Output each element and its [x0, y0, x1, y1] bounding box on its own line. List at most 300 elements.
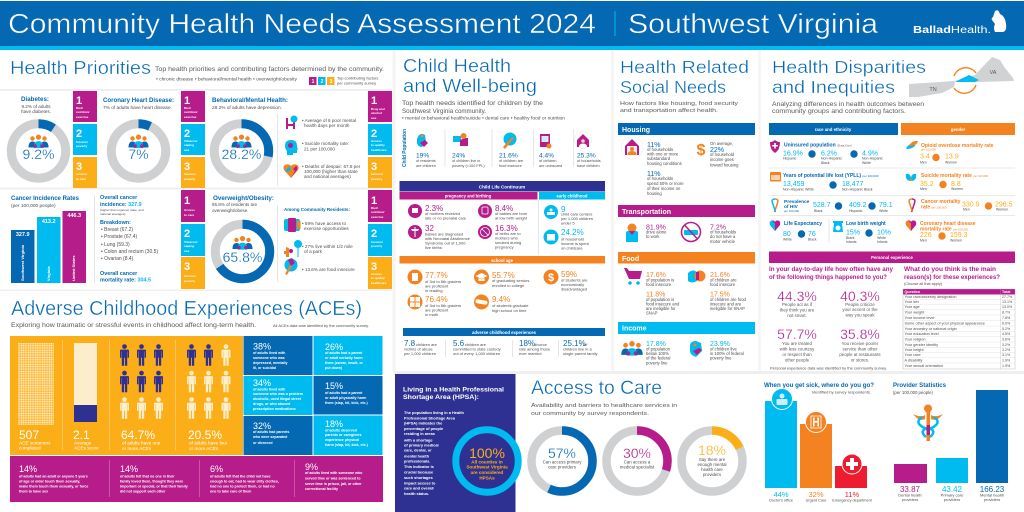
- group: pregnancy and birthing stats: mothers who: [495, 236, 519, 240]
- header band: Southwest Virginia: [628, 8, 878, 39]
- group: gender disparities: Men: [920, 238, 927, 242]
- panel: ACE percentages grid: them (swear, insult, or: [325, 361, 364, 365]
- group: early childhood stats: per 1,000 children: [561, 216, 593, 221]
- group: race and ethnicity disparities: Low birth weight: [846, 221, 886, 227]
- text block: day-to-day experience stats: or respect than: [782, 352, 812, 357]
- table: reasons for experiences: 4.5%: [1002, 332, 1011, 336]
- text block: day-to-day experience stats: People criticize: [845, 302, 875, 307]
- heading: adverse childhood experiences: Adverse Childhood Experiences (ACEs): [11, 298, 362, 320]
- group: early childhood stats: [544, 205, 593, 250]
- group: gender disparities: Men: [963, 208, 970, 212]
- table: reasons for experiences: Your ancestry or national origin: [904, 327, 957, 331]
- bar chart: cancer incidence: Southwest Virginia: [20, 244, 25, 281]
- group: race and ethnicity disparities: of HIV: [784, 204, 799, 210]
- panel: health professional shortage area: The population living in a Health: [404, 410, 464, 415]
- group: gender disparities: 35.2: [920, 181, 934, 188]
- panel: health professional shortage area: care and overall: [404, 486, 434, 490]
- panel: behavioral and mental health: • Deaths of despair: 67.8 per: [302, 164, 361, 169]
- donut: mental health providers 18%: 18%: [698, 442, 726, 458]
- panel: access to care heading: Access to Care: [531, 378, 662, 399]
- group: early childhood stats: child care centers: [561, 212, 592, 216]
- table: reasons for experiences: 8.7%: [1002, 310, 1011, 314]
- group: pregnancy and birthing stats: 2.3%: [425, 204, 443, 213]
- cards: cancer factors: 3: [184, 261, 190, 273]
- panel: ACE statistics orange block: of adults have one: [122, 440, 161, 446]
- panel: ACE percentages grid: 38%: [253, 342, 271, 352]
- panel: ACE magenta band: of adults had an adult or anyone 5 years: [19, 474, 88, 478]
- panel: housing: of their income on: [647, 186, 681, 191]
- panel: food: [618, 252, 755, 316]
- panel: adverse childhood experiences stats: of: [584, 342, 588, 347]
- panel: ACE percentages grid: 34%: [253, 378, 271, 388]
- table: reasons for experiences: 13.1%: [1002, 300, 1013, 304]
- text block: cancer overview: • Breast (67.2): [101, 227, 133, 233]
- text block: day-to-day experience stats: with less courtesy: [780, 346, 815, 352]
- group: gender disparities: rate per 100,000: [921, 204, 946, 210]
- table: reasons for experiences: 3.6%: [1002, 338, 1011, 342]
- chart: when you get sick, where do you go: Doctor's office: [769, 498, 793, 502]
- header band: [0, 1, 1024, 50]
- panel: food: food insecure: [710, 282, 736, 287]
- group: pregnancy and birthing stats: 16.3%: [495, 224, 518, 233]
- table: reasons for experiences: Your income level: [904, 316, 934, 320]
- map: Tennessee and Virginia: [909, 57, 1014, 97]
- group: gender disparities: 3.4: [920, 154, 930, 160]
- donut: 28.2%: [214, 124, 269, 178]
- panel: access to care heading: our community by survey respondents.: [531, 411, 649, 417]
- group: gender disparities: Women: [996, 208, 1008, 212]
- cards: obesity factors: Income/: [371, 240, 383, 244]
- icon: no car: [682, 222, 700, 242]
- panel: child health and well-being heading: Top health needs identified for children by the: [402, 100, 544, 107]
- panel: race and ethnicity bar: race and ethnicity: [815, 127, 852, 132]
- panel: ACE magenta band: [10, 456, 383, 502]
- icon: emergency cross: [842, 454, 862, 474]
- panel: adverse childhood experiences stats: ever married: [519, 351, 541, 356]
- panel: school age: are proficient: [425, 308, 449, 312]
- panel: overweight and obesity: • 59% have access to: [302, 221, 346, 226]
- chart: provider statistics: Dental health: [898, 492, 922, 498]
- panel: health professional shortage area: [395, 374, 518, 512]
- icon: urgent care H: [806, 412, 826, 432]
- table: reasons for experiences: Total: [1002, 290, 1010, 294]
- cards: obesity factors: [368, 190, 392, 289]
- group: pregnancy and birthing stats: smoked during: [495, 240, 521, 245]
- cards: diabetes factors: to care: [76, 177, 86, 181]
- icon: commuter: [626, 224, 638, 242]
- icon: heart: [770, 220, 780, 231]
- group: race and ethnicity disparities: Hispanic: [783, 156, 797, 160]
- panel: health priorities heading: Top health priorities and contributing factors determined by the community.: [155, 66, 384, 73]
- table: reasons for experiences: 1.9%: [1002, 364, 1011, 368]
- panel: health professional shortage area: (HPSA) indicates the: [404, 420, 443, 426]
- group: pregnancy and birthing stats: [408, 200, 538, 255]
- cards: diabetes factors: exercise: [76, 115, 89, 119]
- table: reasons for experiences: Some other aspect of your physical appearance: [904, 322, 985, 326]
- icon: diploma: [474, 294, 489, 310]
- bar chart: cancer incidence: [11, 211, 86, 283]
- panel: school age: 9.4%: [492, 295, 510, 304]
- donut: 65.8%: [215, 224, 270, 279]
- panel: food: ineligible for SNAP: [710, 306, 745, 311]
- group: gender disparities: [906, 141, 1013, 242]
- panel: school age: of students are: [561, 278, 588, 282]
- panel: housing: income goes: [710, 157, 734, 162]
- panel: school age: 59%: [561, 270, 577, 279]
- cards: heart disease factors: 2: [184, 128, 190, 140]
- panel: income: poverty line: [710, 356, 732, 360]
- group: race and ethnicity disparities: Black: [814, 209, 823, 213]
- panel: child population: 21.6%: [499, 152, 518, 160]
- text block: cancer overview: national averages): [100, 212, 125, 216]
- panel: food: 21.6%: [710, 272, 730, 279]
- panel: school age: of graduating seniors: [492, 278, 529, 283]
- panel: ACE percentages grid: of adults had a parent: [325, 351, 363, 355]
- panel: gender bar: gender: [951, 127, 965, 132]
- panel: health professional shortage area: Shortage Area (HPSA):: [403, 394, 479, 401]
- panel: health disparities heading: Health Disparities: [772, 57, 926, 77]
- panel: child population: are uninsured: [539, 164, 562, 168]
- panel: housing: 11%: [647, 171, 660, 178]
- group: gender disparities: 159.3: [950, 232, 968, 239]
- panel: health professional shortage area: crucial because: [404, 470, 434, 474]
- text block: day-to-day experience stats: People act as if: [782, 302, 813, 307]
- panel: food: 17.5%: [710, 292, 730, 298]
- panel: ACE magenta band: 9%: [305, 462, 318, 472]
- group: race and ethnicity disparities: Prevalence: [784, 199, 810, 205]
- bar chart: cancer incidence: 446.3: [67, 213, 81, 219]
- panel: ACE percentages grid: 26%: [325, 342, 343, 352]
- chart: provider statistics: providers: [902, 497, 918, 502]
- panel: personal experience bar: [769, 252, 1015, 263]
- panel: personal experience bar: Personal experience: [871, 255, 914, 260]
- pictogram: four or more ACEs: [187, 344, 230, 419]
- row dividers: [769, 168, 1015, 243]
- panel: ACE statistics orange block: [10, 336, 243, 455]
- group: race and ethnicity disparities: White: [877, 236, 886, 240]
- panel: behavioral and mental health: 21 per 100,000: [304, 146, 335, 152]
- group: gender disparities: mortality rate per 100,000: [920, 226, 968, 232]
- cards: diabetes factors: Access: [76, 172, 87, 176]
- panel: health professional shortage area: care, dental, or: [404, 448, 432, 452]
- table: reasons for experiences: Your gender identity: [904, 343, 938, 347]
- panel: ACE percentages grid: ill, or suicidal: [253, 366, 276, 370]
- panel: cancer incidence rates: (per 100,000 people): [11, 203, 56, 209]
- cards: cancer factors: 2: [184, 228, 190, 240]
- panel: ACE percentages grid: of adults lived with: [253, 388, 285, 392]
- cards: cancer factors: 1: [184, 195, 190, 207]
- title: Community Health Needs Assessment 2024: [8, 8, 596, 39]
- panel: child health and well-being heading: Child Health: [403, 55, 511, 76]
- panel: overweight and obesity: • 27% live within 1/2 mile: [302, 244, 353, 249]
- donut: primary care 57%: 57%: [548, 445, 576, 461]
- group: race and ethnicity disparities: per 100,000: [784, 209, 799, 213]
- icon: dollar: [544, 270, 558, 284]
- panel: adverse childhood experiences stats: children live in a: [563, 346, 592, 352]
- panel: child life continuum header: early childhood: [557, 194, 588, 198]
- donut: 100% HPSA: [456, 430, 518, 492]
- cards: heart disease factors: nutrition/: [184, 110, 198, 114]
- donut: mental health providers 18%: providers: [703, 472, 722, 477]
- donut: mental health providers 18%: health care: [701, 467, 723, 472]
- panel: diabetes: [11, 96, 66, 178]
- group: gender disparities: Opioid overdose mortality rate: [921, 143, 994, 149]
- panel: housing: On average,: [710, 141, 733, 146]
- text block: cancer overview: mortality rate: 304.5: [100, 278, 151, 284]
- panel: health professional shortage area: This indicator is: [404, 464, 434, 469]
- panel: health professional shortage area: residing in areas: [404, 431, 435, 436]
- text block: day-to-day experience stats: 35.8%: [840, 326, 880, 342]
- panel: transportation: to work: [646, 234, 660, 239]
- text block: cancer overview: Overall cancer: [100, 271, 138, 277]
- panel: school age: of students graduate: [492, 303, 529, 308]
- panel: income: below 100%: [646, 351, 669, 356]
- donut: medical specialist 30%: medical specialist: [620, 464, 655, 470]
- donut: medical specialist 30%: [606, 430, 668, 492]
- cards: heart disease factors: Diet/: [184, 106, 191, 110]
- text block: cancer overview: [100, 195, 158, 284]
- panel: housing: Housing: [622, 127, 650, 134]
- panel: school age: in math: [425, 312, 438, 317]
- group: race and ethnicity disparities: White: [862, 161, 871, 165]
- group: pregnancy and birthing stats: babies are diagnosed: [425, 232, 463, 236]
- panel: health priorities heading: 1: [312, 79, 315, 85]
- panel: ACE magenta band: serve time in prison, jail, or other: [305, 482, 362, 486]
- group: race and ethnicity disparities: Uninsured population (Data.Gov): [784, 142, 852, 148]
- group: gender disparities: per 100,000: [921, 148, 936, 152]
- panel: housing: [618, 123, 755, 196]
- panel: school age: high school on time: [492, 308, 527, 313]
- cards: obesity factors: 3: [371, 261, 377, 273]
- panel: adverse childhood experiences stats: 25.1%: [563, 339, 586, 348]
- cards: cancer factors: Access: [184, 208, 195, 212]
- panel: food: 11.8%: [646, 292, 665, 298]
- icon: low birth weight scale: [478, 204, 492, 218]
- panel: ACE percentages grid: harm (slap, hit, kick, etc.): [325, 443, 369, 447]
- table: reasons for experiences: Your sex: [904, 300, 919, 304]
- panel: ACE statistics orange block: 64.7%: [121, 428, 155, 442]
- panel: health related social needs heading: Social Needs: [620, 77, 726, 97]
- panel: ACE percentages grid: parents or caregivers: [325, 433, 362, 437]
- map: Tennessee and Virginia: VA: [990, 70, 997, 76]
- panel: health priorities heading: [10, 58, 384, 86]
- section separators: [0, 50, 1024, 374]
- donut: primary care 57%: [532, 430, 592, 492]
- cards: cancer factors: [181, 190, 205, 289]
- text block: day-to-day experience stats: 57.7%: [777, 326, 817, 342]
- icon: child care centers: [544, 205, 558, 219]
- panel: behavioral and mental health: health days per month: [304, 123, 350, 128]
- panel: income: in 100% of federal: [710, 351, 744, 356]
- panel: school age: disadvantaged: [561, 286, 587, 292]
- group: race and ethnicity disparities: 4.9%: [862, 150, 878, 158]
- cards: mental health factors: Drug and: [371, 107, 385, 111]
- panel: child population: [402, 129, 601, 168]
- cards: heart disease factors: poverty: [184, 177, 195, 181]
- panel: ACE magenta band: served time or was sentenced to: [305, 476, 361, 480]
- group: race and ethnicity disparities: 528.7: [813, 202, 831, 209]
- panel: housing: of household: [710, 152, 735, 157]
- icon: apple in hand: [688, 270, 706, 282]
- icon: caduceus: [913, 404, 943, 441]
- cards: diabetes factors: Income/: [76, 140, 88, 144]
- icon: income folder: [544, 230, 558, 244]
- group: race and ethnicity disparities: Non-Hispanic: [862, 156, 883, 160]
- chart: provider statistics: [893, 383, 1008, 502]
- group: race and ethnicity disparities: 15%: [846, 230, 860, 236]
- group: pregnancy and birthing stats: of mothers received: [425, 211, 460, 216]
- group: pregnancy and birthing stats: at low birth weight: [495, 216, 528, 220]
- group: pregnancy and birthing stats: with Neonatal Abstinence: [425, 236, 471, 241]
- group: pregnancy and birthing stats: late or no prenatal care: [425, 216, 467, 220]
- panel: school age: 77.7%: [425, 271, 448, 280]
- text block: cancer overview: incidence: 327.9: [100, 202, 142, 208]
- panel: ACE magenta band: had no one to protect them, or had no: [210, 484, 275, 488]
- panel: ACE percentages grid: drugs, or who abused: [253, 402, 290, 406]
- panel: child health and well-being heading: • mental or behavioral health/suicide • dental care • healthy food or nutrition: [402, 116, 566, 120]
- table: reasons for experiences: 6.0%: [1002, 322, 1011, 326]
- panel: ACE magenta band: did not support each other: [120, 490, 166, 494]
- panel: health disparities heading: and Inequities: [772, 77, 895, 97]
- panel: adverse childhood experiences stats: 5.6: [453, 339, 465, 348]
- group: gender disparities: 226: [920, 232, 932, 239]
- icon: park: [284, 240, 302, 257]
- panel: housing: spend 50% or more: [647, 181, 684, 186]
- panel: health professional shortage area: of primary medical: [404, 442, 439, 448]
- panel: child population: poverty (<100 FPL): [452, 164, 485, 168]
- cards: heart disease factors: Income/: [184, 172, 196, 176]
- text block: cancer overview: • Ovarian (8.4): [101, 256, 134, 262]
- panel: ACE magenta band: 14%: [19, 464, 37, 474]
- panel: ACE statistics orange block: completed: [19, 446, 41, 450]
- donut: 7%: 7%: [128, 146, 149, 162]
- panel: health disparities heading: Analyzing differences in health outcomes between: [772, 102, 924, 108]
- panel: health priorities heading: Health Priorities: [10, 58, 151, 78]
- donut: 100% HPSA: 100%: [469, 445, 505, 461]
- panel: overweight and obesity: [212, 196, 355, 282]
- icon: dollar: $: [548, 272, 554, 284]
- panel: adverse childhood experiences stats: adverse childhood experiences: [472, 330, 537, 335]
- panel: cancer incidence rates: [11, 195, 94, 283]
- panel: health professional shortage area: such shortages: [404, 475, 433, 480]
- panel: transportation: [618, 205, 755, 244]
- cards: mental health factors: 1: [371, 95, 377, 107]
- panel: child life continuum header: Child Life Continuum: [479, 184, 525, 190]
- panel: health professional shortage area: Professional Shortage Area: [404, 416, 456, 420]
- panel: ACE percentages grid: of adults had a parent: [325, 391, 363, 395]
- panel: transportation: of households: [710, 230, 736, 234]
- map: Tennessee and Virginia: TN: [929, 87, 937, 93]
- panel: food: are ineligible for: [646, 306, 676, 311]
- donut: 28.2%: 28.2%: [222, 146, 261, 162]
- cards: obesity factors: exercise: [371, 215, 384, 219]
- text block: day-to-day experience stats: they think you are: [780, 308, 815, 312]
- icon: dollar sign: $: [697, 142, 706, 159]
- panel: ACE statistics orange block: or more ACEs: [122, 446, 152, 451]
- group: gender disparities: 13.9: [945, 154, 959, 160]
- panel: transportation: motor vehicle: [710, 239, 736, 244]
- icon: uninsured document: [540, 134, 552, 148]
- icon: calculator: [408, 294, 422, 310]
- panel: income: of children live: [710, 346, 737, 352]
- panel: adverse childhood experiences stats: children are: [416, 342, 438, 347]
- panel: overweight and obesity: Overweight/Obesity:: [213, 196, 274, 202]
- group: pregnancy and birthing stats: of births are to: [495, 231, 521, 236]
- icon: graduation cap: [474, 270, 489, 284]
- panel: child population: 4.4%: [539, 152, 554, 160]
- donut: primary care 57%: Can access primary: [543, 460, 582, 464]
- chart: when you get sick, where do you go: 32%: [808, 490, 824, 499]
- cards: obesity factors: healthcare: [371, 281, 387, 285]
- panel: ACE magenta band: them to have sex: [19, 490, 48, 494]
- cards: cancer factors: Income/: [184, 274, 196, 278]
- panel: ACE percentages grid: of adults lived with: [253, 351, 285, 355]
- text block: day-to-day experience stats: way you speak: [845, 312, 875, 318]
- group: race and ethnicity disparities: 6.2%: [821, 150, 837, 158]
- group: race and ethnicity disparities: 76: [808, 231, 816, 238]
- text block: day-to-day experience stats: your accent or the: [842, 307, 878, 312]
- cards: obesity factors: 2: [371, 228, 377, 240]
- panel: ACE magenta band: family loved them, thought they were: [120, 480, 183, 484]
- cards: obesity factors: Access: [371, 272, 382, 276]
- table: reasons for experiences: Your education level: [904, 332, 939, 336]
- icon: calendar: [770, 172, 781, 182]
- cards: cancer factors: poverty: [184, 279, 195, 283]
- cards: obesity factors: to quality: [371, 276, 385, 280]
- group: race and ethnicity disparities: 13,459: [783, 181, 805, 188]
- cards: cancer factors: vaping: [184, 244, 194, 248]
- panel: income: poverty line: [646, 360, 668, 366]
- panel: ACE percentages grid: [244, 336, 382, 455]
- panel: diabetes: have diabetes.: [21, 109, 51, 114]
- panel: ACE statistics orange block: 507: [19, 428, 39, 442]
- panel: child life continuum header: pregnancy and birthing: [445, 194, 492, 198]
- panel: food: food insecure: [646, 282, 672, 287]
- icon: broken heart: [283, 164, 299, 178]
- panel: child population: 19%: [416, 152, 429, 160]
- donut: medical specialist 30%: 30%: [623, 445, 651, 461]
- panel: ACE percentages grid: who were separated: [252, 435, 287, 439]
- panel: school age: [400, 256, 605, 317]
- panel: health related social needs heading: and transportation affect health.: [620, 108, 718, 114]
- donut: 100% HPSA: All counties in: [471, 460, 503, 464]
- panel: school age: of 3rd to 8th graders: [425, 303, 461, 308]
- table: reasons for experiences: Your religion: [904, 338, 925, 342]
- text block: day-to-day experience stats: You are treated: [782, 341, 812, 346]
- panel: ACE percentages grid: depressed, mentally: [253, 361, 288, 365]
- text block: day-to-day experience stats: people at restaurants: [839, 352, 881, 357]
- panel: behavioral and mental health: • Average of 6 poor mental: [302, 118, 356, 123]
- chart: when you get sick, where do you go: [764, 383, 874, 502]
- panel: child population: have children: [577, 164, 600, 168]
- cards: heart disease factors: 3: [184, 161, 190, 173]
- chart: provider statistics: providers: [944, 497, 960, 502]
- group: race and ethnicity disparities: Infants: [877, 240, 888, 244]
- text block: day-to-day experience stats: of the following things happened to you?: [769, 274, 887, 281]
- panel: health priorities heading: Top contributing factors: [337, 76, 378, 80]
- panel: adverse childhood experiences stats: out of every 1,000 children: [453, 351, 500, 356]
- icon: butterfly: [906, 174, 916, 181]
- icon: uninsured shield: [770, 140, 780, 153]
- panel: ACE percentages grid: someone who was a problem: [253, 392, 303, 396]
- table: reasons for experiences: Your sexual orientation: [904, 364, 943, 368]
- panel: ACE percentages grid: or adult physically harm: [325, 396, 366, 400]
- panel: ACE percentages grid: of adults had parents: [253, 430, 289, 434]
- text block: cancer overview: • Prostate (67.4): [101, 234, 138, 240]
- panel: race and ethnicity bar: [769, 123, 898, 135]
- table: reasons for experiences: [903, 266, 1015, 369]
- panel: school age: enrolled in college: [492, 283, 525, 288]
